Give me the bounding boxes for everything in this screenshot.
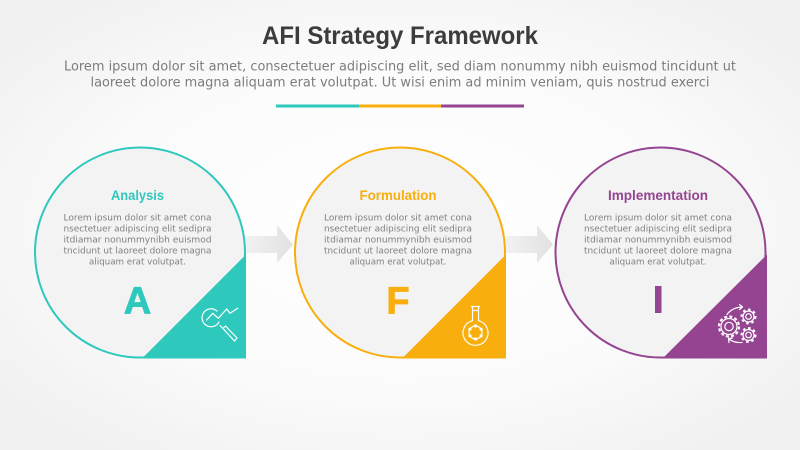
description: tncidunt ut laoreet dolore magna bbox=[64, 246, 212, 256]
description bbox=[324, 212, 472, 266]
circle body bbox=[35, 148, 245, 358]
subtitle text bbox=[64, 60, 736, 90]
description: itdiamar nonummynibh euismod bbox=[584, 234, 732, 244]
description: aliquam erat volutpat. bbox=[350, 256, 446, 266]
tri-colour divider bbox=[276, 104, 524, 108]
description: nsectetuer adipiscing elit sedipra bbox=[64, 224, 212, 234]
corner wedge bbox=[402, 254, 506, 358]
subtitle text: laoreet dolore magna aliquam erat volutpat. Ut wisi enim ad minim veniam, quis nostrud exerci bbox=[90, 76, 710, 90]
corner wedge bbox=[662, 254, 767, 358]
description bbox=[584, 212, 732, 266]
letter A: A bbox=[124, 280, 151, 322]
description bbox=[64, 212, 212, 266]
letter I bbox=[655, 286, 662, 313]
description: itdiamar nonummynibh euismod bbox=[64, 234, 212, 244]
description: nsectetuer adipiscing elit sedipra bbox=[584, 224, 732, 234]
heading: Analysis bbox=[111, 188, 164, 203]
description: itdiamar nonummynibh euismod bbox=[324, 234, 472, 244]
icon: gears with cycle arrows bbox=[719, 304, 756, 343]
circle body bbox=[556, 148, 766, 358]
description: Lorem ipsum dolor sit amet cona bbox=[64, 212, 212, 222]
panel: analysis bbox=[35, 148, 246, 358]
letter F: F bbox=[386, 280, 410, 322]
arrow: formulation to implementation bbox=[506, 225, 553, 263]
icon: magnifier with trend line bbox=[202, 308, 238, 341]
subtitle text: Lorem ipsum dolor sit amet, consectetuer adipiscing elit, sed diam nonummy nibh euismod tincidunt ut bbox=[64, 60, 736, 74]
panel: implementation bbox=[556, 148, 767, 358]
description: aliquam erat volutpat. bbox=[89, 256, 186, 266]
panel: formulation bbox=[295, 148, 506, 358]
title: AFI Strategy Framework bbox=[262, 22, 538, 50]
heading: Implementation bbox=[608, 188, 708, 203]
description: aliquam erat volutpat. bbox=[610, 256, 706, 266]
icon: chemistry flask bbox=[463, 306, 488, 345]
circle body bbox=[295, 148, 505, 358]
description: tncidunt ut laoreet dolore magna bbox=[324, 246, 472, 256]
description: Lorem ipsum dolor sit amet cona bbox=[584, 212, 732, 222]
description: tncidunt ut laoreet dolore magna bbox=[584, 246, 732, 256]
corner wedge bbox=[142, 254, 246, 358]
heading: Formulation bbox=[360, 188, 436, 203]
arrow: analysis to formulation bbox=[246, 225, 293, 263]
description: nsectetuer adipiscing elit sedipra bbox=[324, 224, 472, 234]
description: Lorem ipsum dolor sit amet cona bbox=[324, 212, 472, 222]
